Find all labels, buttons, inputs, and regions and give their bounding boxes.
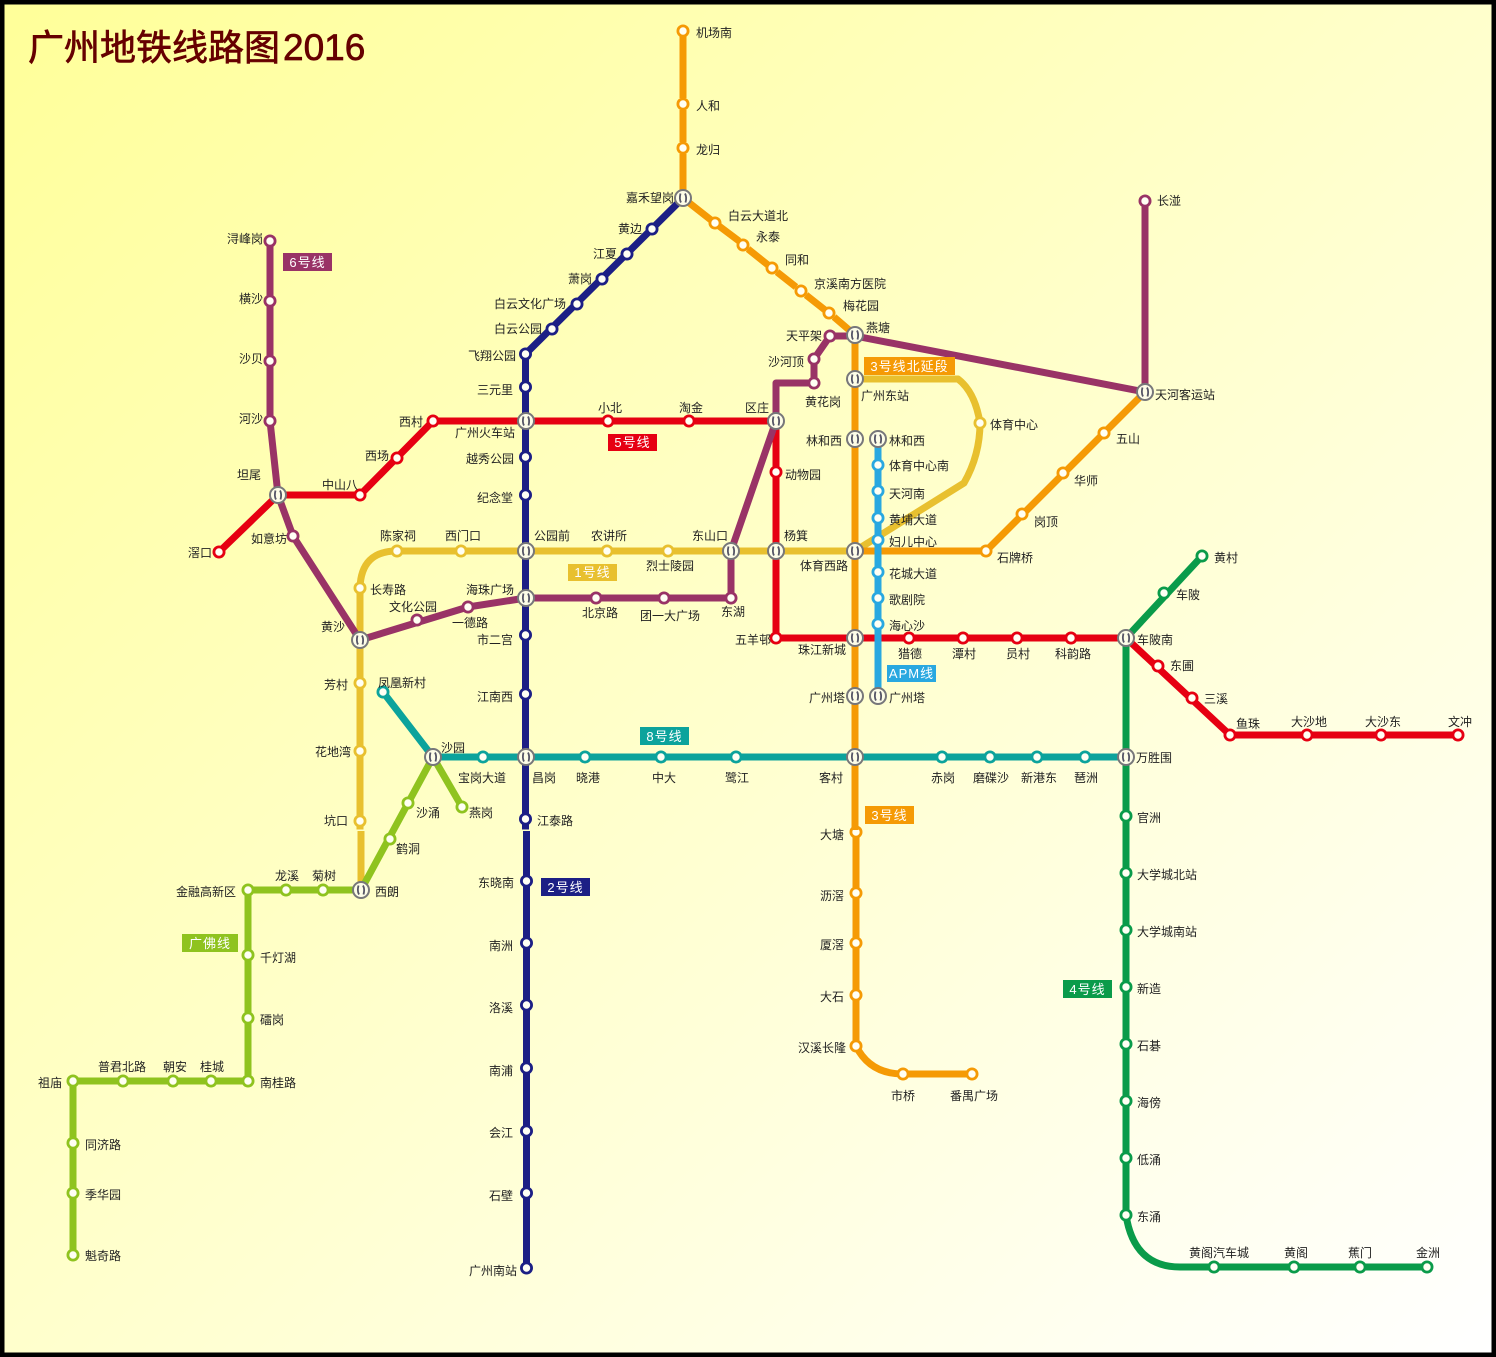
line 2 stations [520,224,657,1273]
line 3 labels: 珠江新城 [798,642,846,657]
line 8 [378,675,1172,785]
line 3 [626,25,1215,1103]
line 5 labels: 滘口 [188,546,212,560]
line 3 labels: 机场南 [696,25,732,40]
line 5 labels: 中山八 [322,477,358,492]
line 1 labels: 西朗 [375,885,399,899]
line 3 labels: 体育西路 [800,558,848,573]
tag: line 1 [568,564,617,581]
line 5 labels: 潭村 [952,647,976,661]
guangfo labels: 南桂路 [260,1075,296,1090]
line 8 labels: 宝岗大道 [458,771,506,785]
line 1 labels: 公园前 [534,528,570,543]
line 5 labels: 东圃 [1170,659,1194,673]
guangfo labels: 金融高新区 [176,884,236,899]
line 3 south route [856,831,972,1074]
line 4 labels: 东涌 [1137,1210,1161,1224]
line 5 labels [188,400,1472,731]
line 8 labels: 鹭江 [725,770,749,785]
tag: line 5 [608,434,657,451]
guangfo labels [38,806,493,1263]
line 3 labels: 汉溪长隆 [798,1040,846,1055]
tag: APM line: APM线 [889,666,934,681]
APM labels: 花城大道 [889,566,937,581]
line 6 labels: 沙河顶 [768,355,804,369]
tag: line 3: 3号线 [871,808,908,823]
line 6 labels: 横沙 [239,292,263,306]
line 2 labels: 越秀公园 [466,452,514,466]
line 1 labels: 坑口 [324,813,348,828]
guangfo labels: 同济路 [85,1137,121,1152]
line 5 labels: 员村 [1006,647,1030,661]
tag: line 3 [865,806,914,824]
line 4 stations [1121,551,1432,1272]
APM labels [889,434,949,705]
guangfo labels: 燕岗 [469,806,493,820]
line 5 labels: 坦尾 [237,468,261,482]
guangfo labels: 普君北路 [98,1059,146,1074]
line 8 labels: 凤凰新村 [378,675,426,690]
tag: line 4 [1063,980,1112,998]
line 4 labels: 石碁 [1137,1039,1161,1053]
guangfo labels: 鹤洞 [396,841,420,856]
line 5 stations [214,416,1463,740]
line 2 labels: 东晓南 [478,875,514,890]
line 1 labels: 农讲所 [591,528,627,543]
line 2 labels: 黄边 [618,222,642,236]
line 6 labels [227,194,1181,630]
tag: line 2 [541,878,590,896]
guangfo labels: 祖庙 [38,1075,62,1090]
line 4 labels: 黄阁 [1284,1246,1308,1260]
line 8 route [383,692,1126,757]
line 3 labels: 永泰 [756,230,780,244]
line 2 labels: 纪念堂 [477,490,513,505]
line 5 labels: 西场 [365,449,389,463]
line 2 labels: 石壁 [489,1188,513,1203]
line 2 labels: 江南西 [477,689,513,704]
line 4 labels: 官洲 [1137,810,1161,825]
line 2 labels: 江泰路 [537,813,573,828]
line 6 labels: 北京路 [582,605,618,620]
line 4 labels: 海傍 [1137,1095,1161,1110]
line 6 labels: 黄花岗 [805,394,841,409]
tag: line 3 north extension: 3号线北延段 [870,359,949,374]
line 6 labels: 东湖 [721,604,745,619]
line 5 labels: 文冲 [1448,714,1472,729]
line 4 labels: 大学城北站 [1137,867,1197,882]
guangfo labels: 礌岗 [260,1013,284,1027]
line 1 labels: 花地湾 [315,744,351,759]
line 4 labels: 车陂 [1176,587,1200,602]
line 3 labels: 华师 [1074,474,1098,488]
line 3 labels: 林和西 [806,434,842,448]
line 1 labels: 长寿路 [370,582,406,597]
APM labels: 妇儿中心 [889,534,937,549]
line 8 labels: 晓港 [576,771,600,785]
line 3 labels: 白云大道北 [728,208,788,223]
line 8 labels: 赤岗 [931,771,955,785]
line 3 labels: 燕塘 [866,320,890,335]
line 3 labels: 岗顶 [1034,515,1058,529]
tag: line 8 [640,727,689,745]
line 3 labels: 市桥 [891,1088,915,1103]
line 4 route [1126,556,1427,1267]
line 6 labels: 如意坊 [251,531,287,546]
guangfo labels: 沙涌 [416,806,440,820]
line 1 labels: 陈家祠 [380,528,416,543]
line 3 labels: 客村 [819,770,843,785]
tag: line 1: 1号线 [574,565,611,580]
line 5 labels: 科韵路 [1055,646,1091,661]
guangfo labels: 季华园 [85,1188,121,1202]
line 8 labels: 新港东 [1021,770,1057,785]
line 3 labels: 嘉禾望岗 [626,191,674,205]
line 8 labels: 万胜围 [1136,750,1172,765]
guangfo labels: 千灯湖 [260,950,296,965]
APM labels: 黄埔大道 [889,513,937,527]
line 2 labels [455,222,642,1278]
line 1 route [360,551,855,830]
line 5 labels: 西村 [399,415,423,429]
line 8 labels: 沙园 [441,741,465,755]
tag: line 8: 8号线 [646,729,683,744]
line 4 labels: 金洲 [1416,1245,1440,1260]
line 3 stations [678,26,1109,1079]
line 5 labels: 动物园 [785,468,821,482]
line 3 labels: 厦滘 [820,938,844,952]
line 5 labels: 淘金 [679,400,703,415]
line 4 labels: 大学城南站 [1137,924,1197,939]
line 8 labels: 琶洲 [1074,771,1098,785]
line 5 labels: 鱼珠 [1236,717,1260,731]
line 2 labels: 三元里 [477,383,513,397]
APM labels: 林和西 [889,434,925,448]
tag: line 4: 4号线 [1069,982,1106,997]
line 1 stations [355,418,985,826]
line 4 [1121,551,1440,1272]
APM labels: 体育中心南 [889,458,949,473]
line 4 labels: 黄村 [1214,551,1238,565]
line 5 labels: 大沙地 [1291,715,1327,729]
guangfo labels: 龙溪 [275,869,299,883]
line 2 labels: 会江 [489,1126,513,1140]
line 2 labels: 白云公园 [494,321,542,336]
line 1 labels: 芳村 [324,678,348,692]
line 4 labels [1137,551,1440,1260]
guangfo labels: 菊树 [312,868,336,883]
line 4 labels: 蕉门 [1348,1245,1372,1260]
line 4 labels: 新造 [1137,981,1161,996]
line 1 labels: 西门口 [445,528,481,543]
APM stations [873,460,883,629]
APM labels: 广州塔 [889,691,925,705]
line 3 labels: 大石 [820,990,844,1004]
line 3 labels [626,25,1215,1103]
guangfo labels: 魁奇路 [85,1248,121,1263]
line 3 labels: 广州东站 [861,389,909,403]
line 2 south route [523,831,530,1268]
APM labels: 海心沙 [889,618,925,633]
line 1 labels: 东山口 [692,529,728,543]
line 2 route [526,198,683,830]
line 2 [455,198,683,1278]
guangfo labels: 朝安 [163,1059,187,1074]
line 8 labels: 中大 [652,770,676,785]
title: 广州地铁线路图2016 [28,27,365,68]
line 8 labels: 磨碟沙 [973,771,1009,785]
line 3 labels: 天河客运站 [1155,387,1215,402]
line 3 labels: 梅花园 [843,298,879,313]
tag: line 6: 6号线 [289,255,326,270]
line 8 labels [378,675,1172,785]
tag: guangfo line [182,934,238,952]
APM labels: 歌剧院 [889,592,925,607]
line 1 labels: 杨箕 [784,528,808,543]
line 4 labels: 低涌 [1137,1153,1161,1167]
line 2 labels: 市二宫 [477,632,513,647]
tag: guangfo line: 广佛线 [189,936,231,951]
guangfo route [73,757,462,1255]
line 3 labels: 沥滘 [820,889,844,903]
line 3 north extension route [855,379,980,551]
line 3 labels: 龙归 [696,143,720,157]
interchange stations [270,190,1153,898]
guangfo stations [68,798,467,1260]
line 1 labels: 烈士陵园 [646,559,694,573]
line 3 labels: 广州塔 [809,691,845,705]
line 3 labels: 同和 [785,253,809,267]
APM route [874,439,882,696]
line 2 labels: 萧岗 [568,272,592,286]
guangfo labels: 桂城 [200,1059,224,1074]
line 4 labels: 黄阁汽车城 [1189,1245,1249,1260]
line 6 labels: 一德路 [452,615,488,630]
line 6 stations [265,196,1150,625]
line 3 labels: 番禺广场 [950,1089,998,1103]
line 6 route [270,201,1145,640]
tag: line 2: 2号线 [547,880,584,895]
line 3 labels: 五山 [1116,432,1140,446]
line 3 east branch route [855,392,1145,551]
line 1 labels [315,417,1038,899]
line 6 labels: 浔峰岗 [227,232,263,246]
line 6 labels: 河沙 [239,412,263,426]
line 6 labels: 沙贝 [239,352,263,366]
tag: line 5: 5号线 [614,435,651,450]
line 5 [188,400,1472,740]
line 6 labels: 长湴 [1157,194,1181,208]
line 2 labels: 飞翔公园 [468,349,516,363]
line 8 stations [378,687,1090,762]
line 1 and line 3 north extension [315,379,1038,899]
tag: line 6 [283,253,332,271]
line 6 labels: 海珠广场 [466,582,514,597]
line 3 labels: 石牌桥 [997,551,1033,565]
line 5 labels: 区庄 [745,400,769,415]
line 5 labels: 小北 [598,401,622,415]
line 2 labels: 广州南站 [469,1263,517,1278]
line 6 labels: 文化公园 [389,599,437,614]
line 3 labels: 人和 [696,99,720,113]
line 5 labels: 三溪 [1204,692,1228,706]
line 2 labels: 白云文化广场 [494,296,566,311]
line 3 labels: 大塘 [820,827,844,842]
line 5 labels: 猎德 [898,646,922,661]
line 1 labels: 体育中心 [990,417,1038,432]
line 2 labels: 洛溪 [489,1000,513,1015]
line 5 labels: 五羊邨 [735,632,771,647]
line 5 labels: 车陂南 [1137,632,1173,647]
APM labels: 天河南 [889,486,925,501]
line 6 labels: 团一大广场 [640,609,700,623]
line 2 labels: 南浦 [489,1063,513,1078]
line 1 south route [358,831,364,890]
line 2 labels: 昌岗 [532,771,556,785]
APM line [873,434,949,705]
guangfo line [38,757,493,1263]
line 2 labels: 江夏 [593,247,617,261]
line 5 route [219,421,1458,735]
line 6 [227,194,1181,640]
line 3 labels: 京溪南方医院 [814,276,886,291]
line 5 labels: 大沙东 [1365,715,1401,729]
line 6 labels: 天平架 [786,329,822,343]
line 3 route [683,36,855,830]
line 2 labels: 南洲 [489,938,513,953]
line 1 labels: 黄沙 [321,620,345,634]
line 2 labels: 广州火车站 [455,425,515,440]
